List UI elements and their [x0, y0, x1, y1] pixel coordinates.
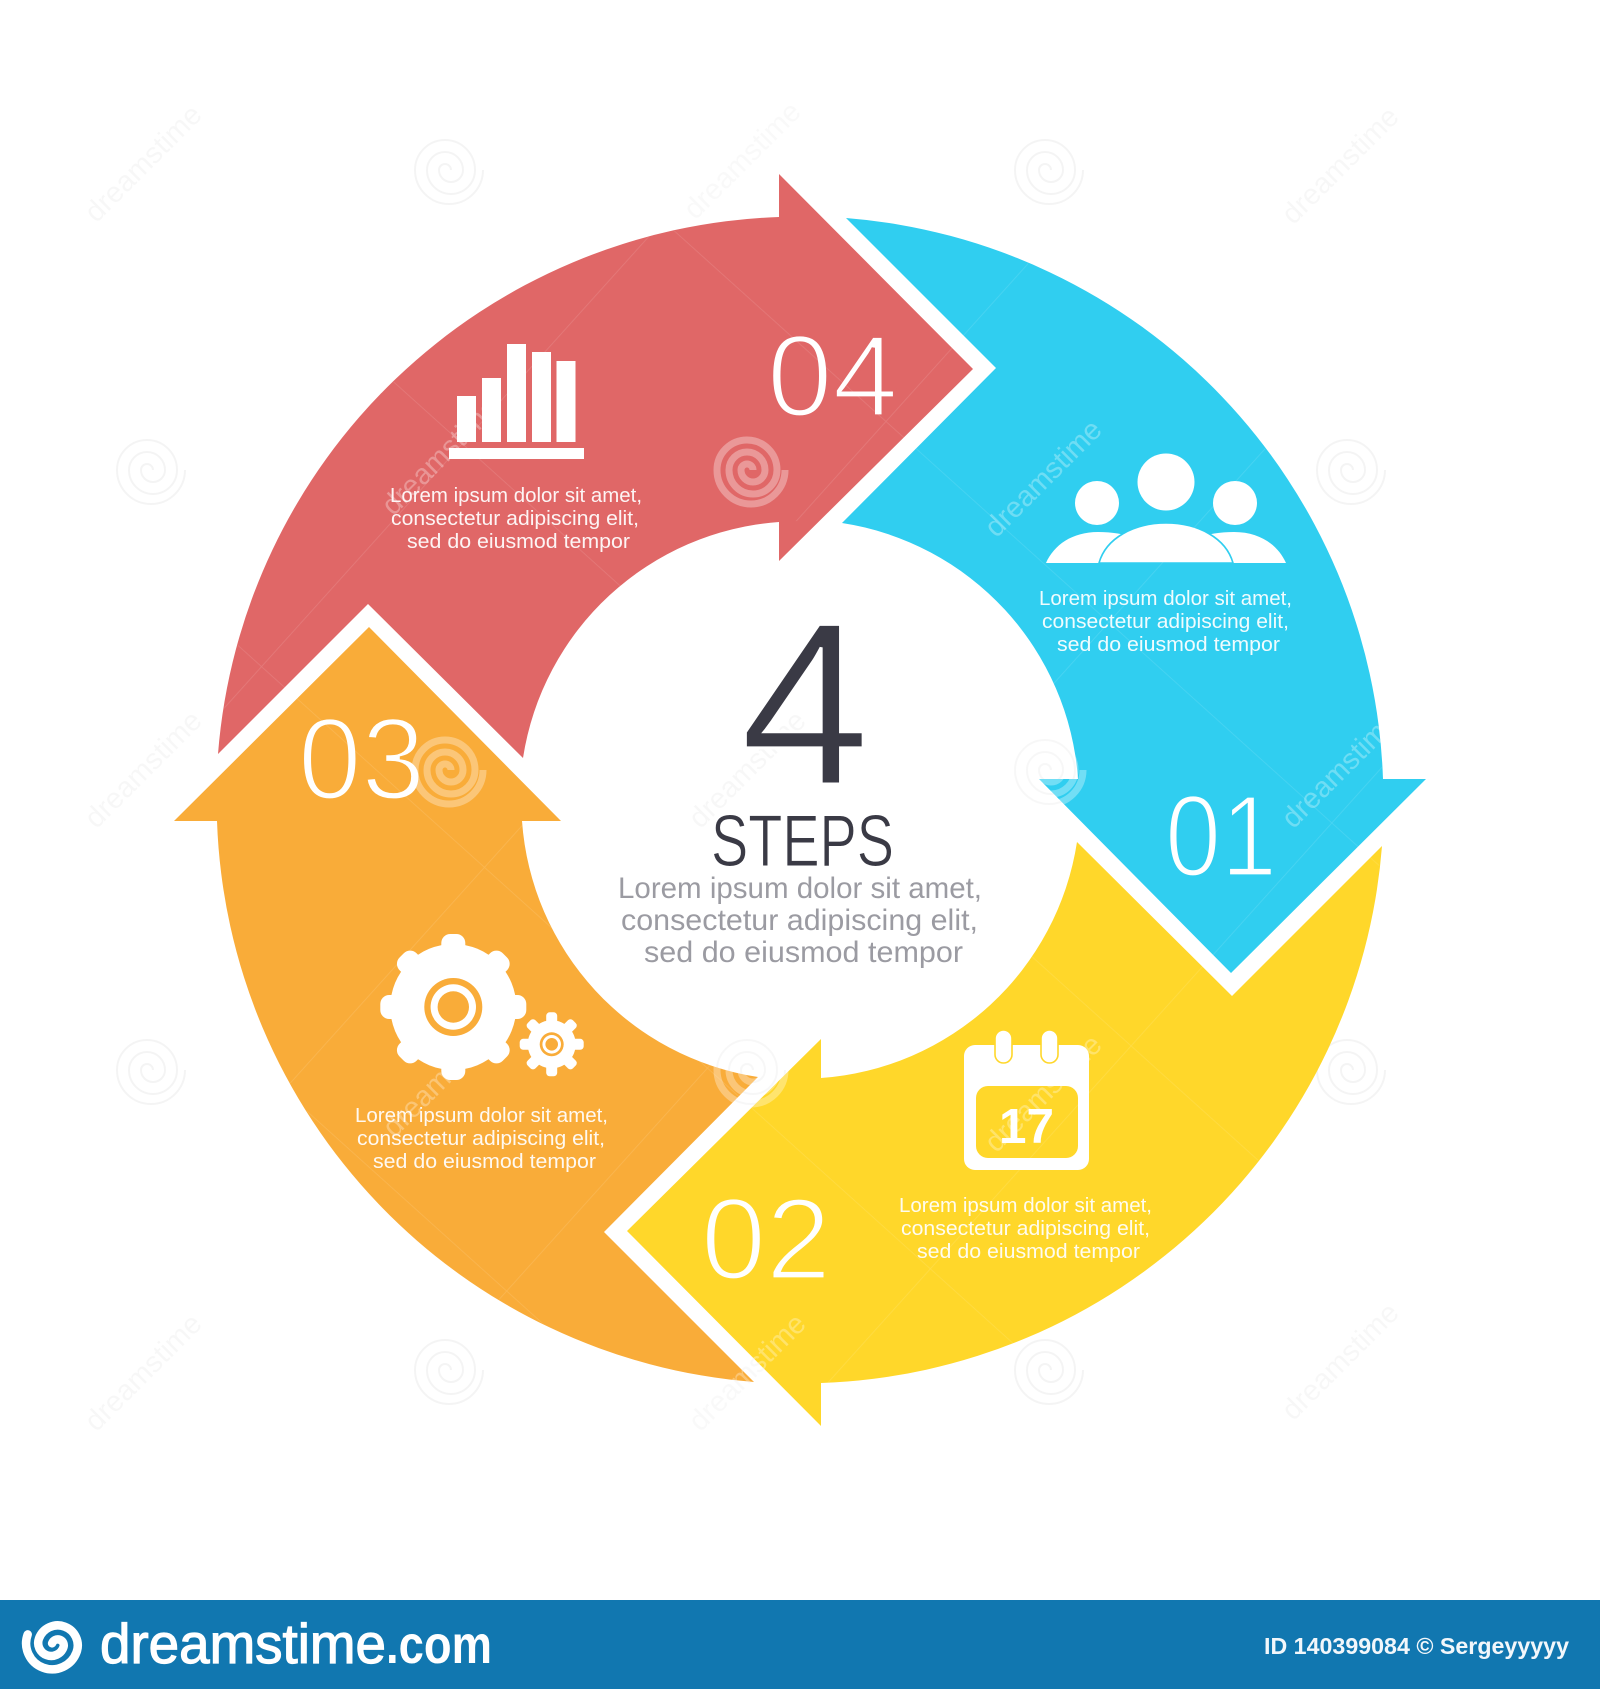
watermark layer: white marks over colour: dreamstime — [376, 392, 506, 522]
step 01 text: Lorem ipsum dolor sit amet, — [1039, 588, 1292, 610]
number 04: 04 — [767, 311, 898, 441]
orange arrow shape — [174, 627, 758, 1382]
panel: step 04 red arrow — [218, 174, 973, 758]
footer wordmark: .com — [386, 1615, 492, 1675]
watermark layer: white marks over colour: dreamstime — [979, 414, 1109, 544]
number 02: 02 — [701, 1174, 831, 1304]
watermark layer: white marks over colour — [224, 231, 1382, 1382]
icon: bar chart — [449, 344, 584, 459]
step 03 text: sed do eiusmod tempor — [373, 1151, 596, 1173]
footer wordmark: dreamstime — [100, 1612, 386, 1675]
icon: people — [1046, 454, 1286, 563]
step 03 text — [355, 1105, 608, 1173]
watermark layer: grey marks on white: dreamstime — [683, 705, 813, 835]
step 04 text: consectetur adipiscing elit, — [391, 508, 639, 530]
number 03: 03 — [298, 694, 425, 824]
step 03 text: consectetur adipiscing elit, — [357, 1128, 605, 1150]
watermark layer: grey marks on white: dreamstime — [1276, 101, 1406, 231]
step 03 text: Lorem ipsum dolor sit amet, — [355, 1105, 608, 1127]
centre title block — [618, 575, 982, 969]
icon: dreamstime spiral logo — [19, 1616, 83, 1677]
blue arrow shape — [842, 218, 1426, 973]
watermark layer: white marks over colour: dreamstime — [683, 1308, 813, 1438]
panel: step 03 orange arrow — [174, 627, 758, 1382]
footer band — [0, 1600, 1600, 1689]
panel: step 02 yellow arrow — [627, 842, 1382, 1426]
step 01 text: consectetur adipiscing elit, — [1042, 611, 1289, 633]
watermark layer: white marks over colour: dreamstime — [979, 1029, 1109, 1159]
watermark layer: grey marks on white: dreamstime — [79, 99, 209, 229]
step 04 text — [390, 485, 642, 553]
icon: gears — [380, 934, 584, 1080]
yellow arrow shape — [627, 842, 1382, 1426]
step 02 text — [899, 1195, 1152, 1263]
red arrow shape — [218, 174, 973, 758]
watermark layer: grey marks on white: dreamstime — [1276, 1297, 1406, 1427]
heading STEPS: STEPS — [711, 801, 894, 882]
step 04 text: Lorem ipsum dolor sit amet, — [390, 485, 642, 507]
watermark layer: grey marks on white: dreamstime — [79, 1308, 209, 1438]
icon: calendar — [964, 1030, 1089, 1170]
centre description: consectetur adipiscing elit, — [621, 904, 978, 937]
panel: step 01 blue arrow — [842, 218, 1426, 973]
step 04 text: sed do eiusmod tempor — [407, 531, 630, 553]
step 02 text: consectetur adipiscing elit, — [901, 1218, 1150, 1240]
watermark layer: white marks over colour: dreamstime — [678, 96, 808, 226]
watermark layer: white marks over colour: dreamstime — [1276, 705, 1406, 835]
watermark layer: grey marks on white — [79, 96, 1406, 1438]
step 02 text: sed do eiusmod tempor — [917, 1241, 1140, 1263]
watermark layer: grey marks on white: dreamstime — [683, 1308, 813, 1438]
watermark layer: grey marks on white: dreamstime — [678, 96, 808, 226]
icon: calendar: 17 — [999, 1100, 1054, 1154]
step 02 text: Lorem ipsum dolor sit amet, — [899, 1195, 1152, 1217]
centre description: Lorem ipsum dolor sit amet, — [618, 872, 982, 905]
step 01 text — [1039, 588, 1292, 656]
image id credit: ID 140399084 © Sergeyyyyy — [1264, 1633, 1569, 1659]
number 01: 01 — [1165, 771, 1277, 901]
centre description — [618, 872, 982, 969]
big numeral 4: 4 — [740, 575, 870, 834]
watermark layer: grey marks on white: dreamstime — [79, 705, 209, 835]
watermark layer: white marks over colour: dreamstime — [377, 1014, 507, 1144]
step 01 text: sed do eiusmod tempor — [1057, 634, 1280, 656]
centre description: sed do eiusmod tempor — [644, 936, 963, 969]
